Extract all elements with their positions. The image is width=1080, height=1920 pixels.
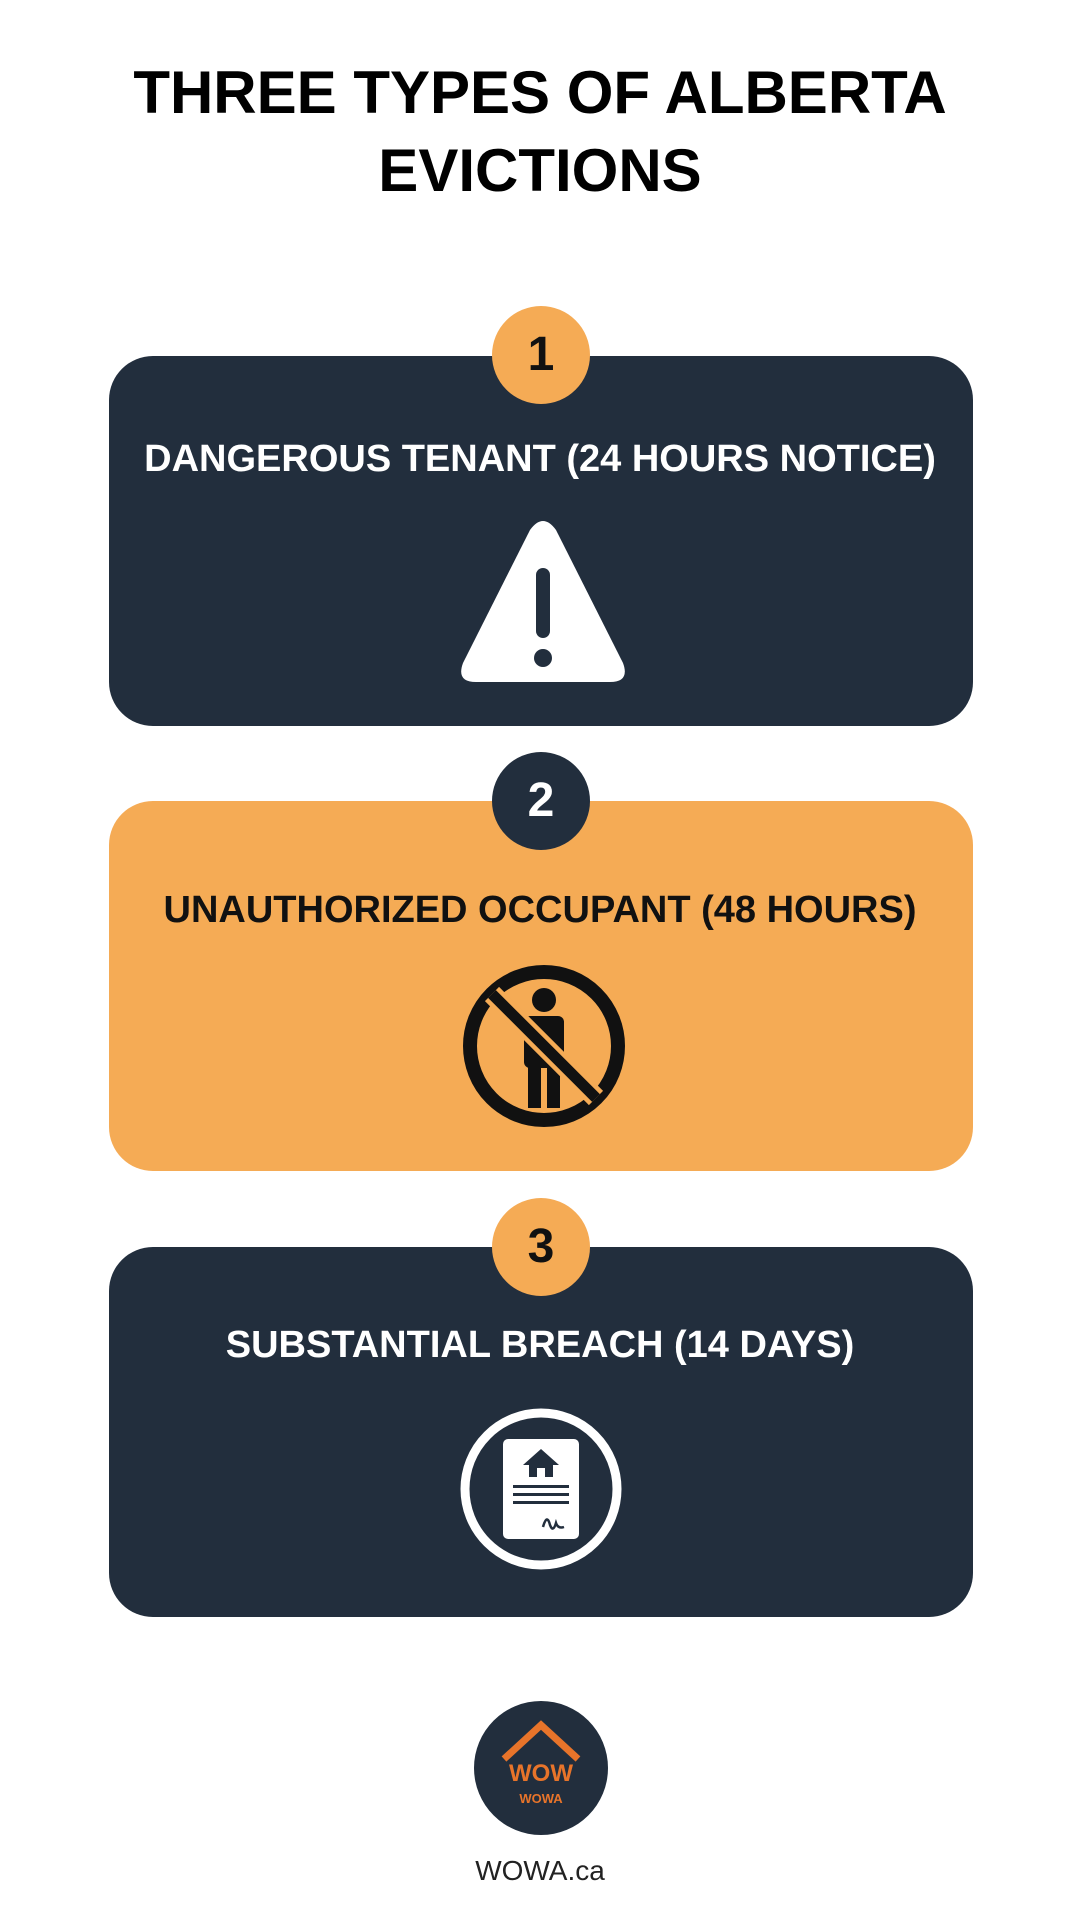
logo xyxy=(474,1701,608,1835)
heading 3: SUBSTANTIAL BREACH (14 DAYS) xyxy=(226,1324,854,1366)
logo: WOW xyxy=(509,1760,573,1787)
badge 2: 2 xyxy=(528,774,554,827)
footer text: WOWA.ca xyxy=(475,1855,605,1886)
title: EVICTIONS xyxy=(378,137,702,204)
icon: no person xyxy=(463,965,625,1127)
badge 1: 1 xyxy=(528,328,554,381)
badge 1 xyxy=(492,306,590,404)
panel: substantial breach xyxy=(109,1247,973,1617)
icon: lease document xyxy=(460,1408,622,1570)
badge 3: 3 xyxy=(528,1220,554,1273)
panel: unauthorized occupant xyxy=(109,801,973,1171)
heading 1: DANGEROUS TENANT (24 HOURS NOTICE) xyxy=(144,438,936,480)
icon: warning xyxy=(461,521,625,682)
panel: dangerous tenant xyxy=(109,356,973,726)
badge 2 xyxy=(492,752,590,850)
heading 2: UNAUTHORIZED OCCUPANT (48 HOURS) xyxy=(164,889,916,931)
badge 3 xyxy=(492,1198,590,1296)
title xyxy=(133,59,947,204)
title: THREE TYPES OF ALBERTA xyxy=(133,59,947,126)
logo: WOWA xyxy=(519,1791,563,1806)
